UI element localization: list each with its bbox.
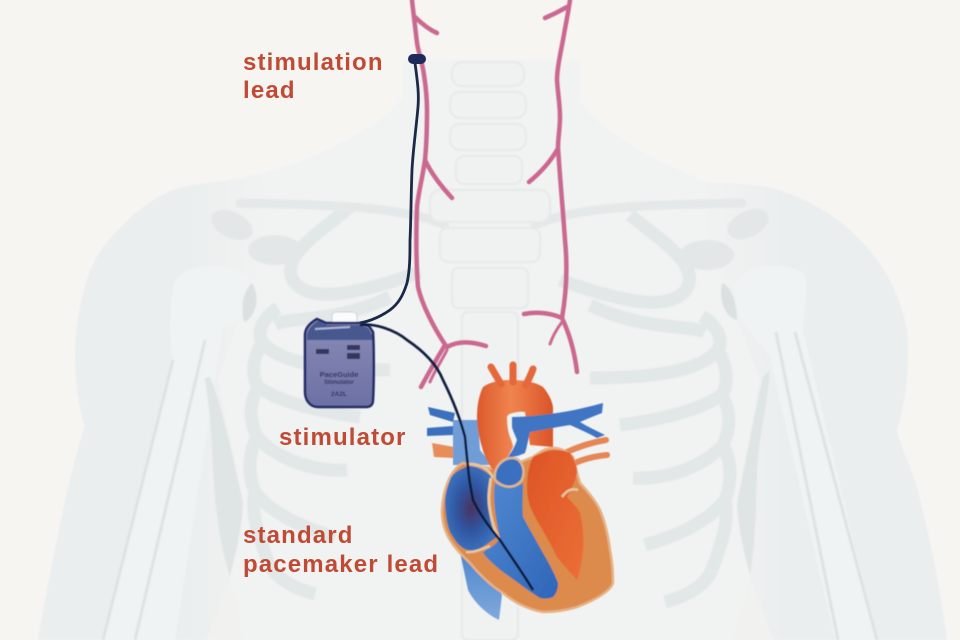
pulmonary veins left bbox=[432, 443, 454, 458]
inferior vena cava bbox=[460, 552, 502, 620]
label: standard pacemaker lead: standard bbox=[243, 522, 354, 549]
pulmonary veins right bbox=[567, 440, 607, 464]
right humerus bbox=[733, 265, 877, 640]
brachiocephalic veins bbox=[427, 407, 455, 436]
right ventricle bbox=[483, 483, 558, 599]
left arm bbox=[38, 176, 270, 640]
label: stimulation lead: lead bbox=[243, 77, 296, 104]
tricuspid valve bbox=[489, 478, 499, 538]
superior vena cava bbox=[453, 420, 492, 465]
stimulator device: 2A2L bbox=[331, 391, 347, 398]
right arm bbox=[700, 182, 947, 640]
device face marks bbox=[316, 345, 360, 359]
heart bbox=[360, 325, 613, 620]
right atrium bbox=[445, 466, 497, 551]
left ribs bbox=[250, 207, 420, 594]
clavicles bbox=[240, 203, 742, 225]
latissimus bands bbox=[737, 370, 770, 575]
label: standard pacemaker lead: pacemaker lead bbox=[243, 551, 439, 578]
stimulator device: PaceGuide bbox=[320, 370, 358, 379]
right ribs bbox=[560, 215, 730, 602]
heart wall bbox=[442, 448, 613, 612]
humerus shaft shadow lines bbox=[103, 332, 877, 640]
left humerus bbox=[103, 266, 256, 640]
label: stimulator: stimulator bbox=[279, 424, 407, 451]
stimulation lead bbox=[360, 54, 426, 323]
pulmonary artery bbox=[507, 403, 605, 458]
scapula joints bbox=[207, 203, 773, 322]
mitral valve bbox=[562, 489, 578, 497]
label: stimulation lead: stimulation bbox=[243, 49, 384, 76]
pacemaker lead bbox=[360, 325, 533, 590]
pulmonary valve bbox=[495, 458, 524, 487]
left atrium and ventricle bbox=[527, 450, 583, 580]
stimulator device bbox=[305, 312, 374, 407]
carotid arteries bbox=[412, 0, 577, 387]
spine bbox=[430, 62, 550, 640]
atrium rim bbox=[467, 464, 493, 478]
stimulator device: Stimulator bbox=[324, 380, 354, 386]
torso overlay at armpit bbox=[207, 580, 773, 640]
aortic arch branches bbox=[491, 365, 533, 385]
aorta bbox=[477, 380, 553, 470]
